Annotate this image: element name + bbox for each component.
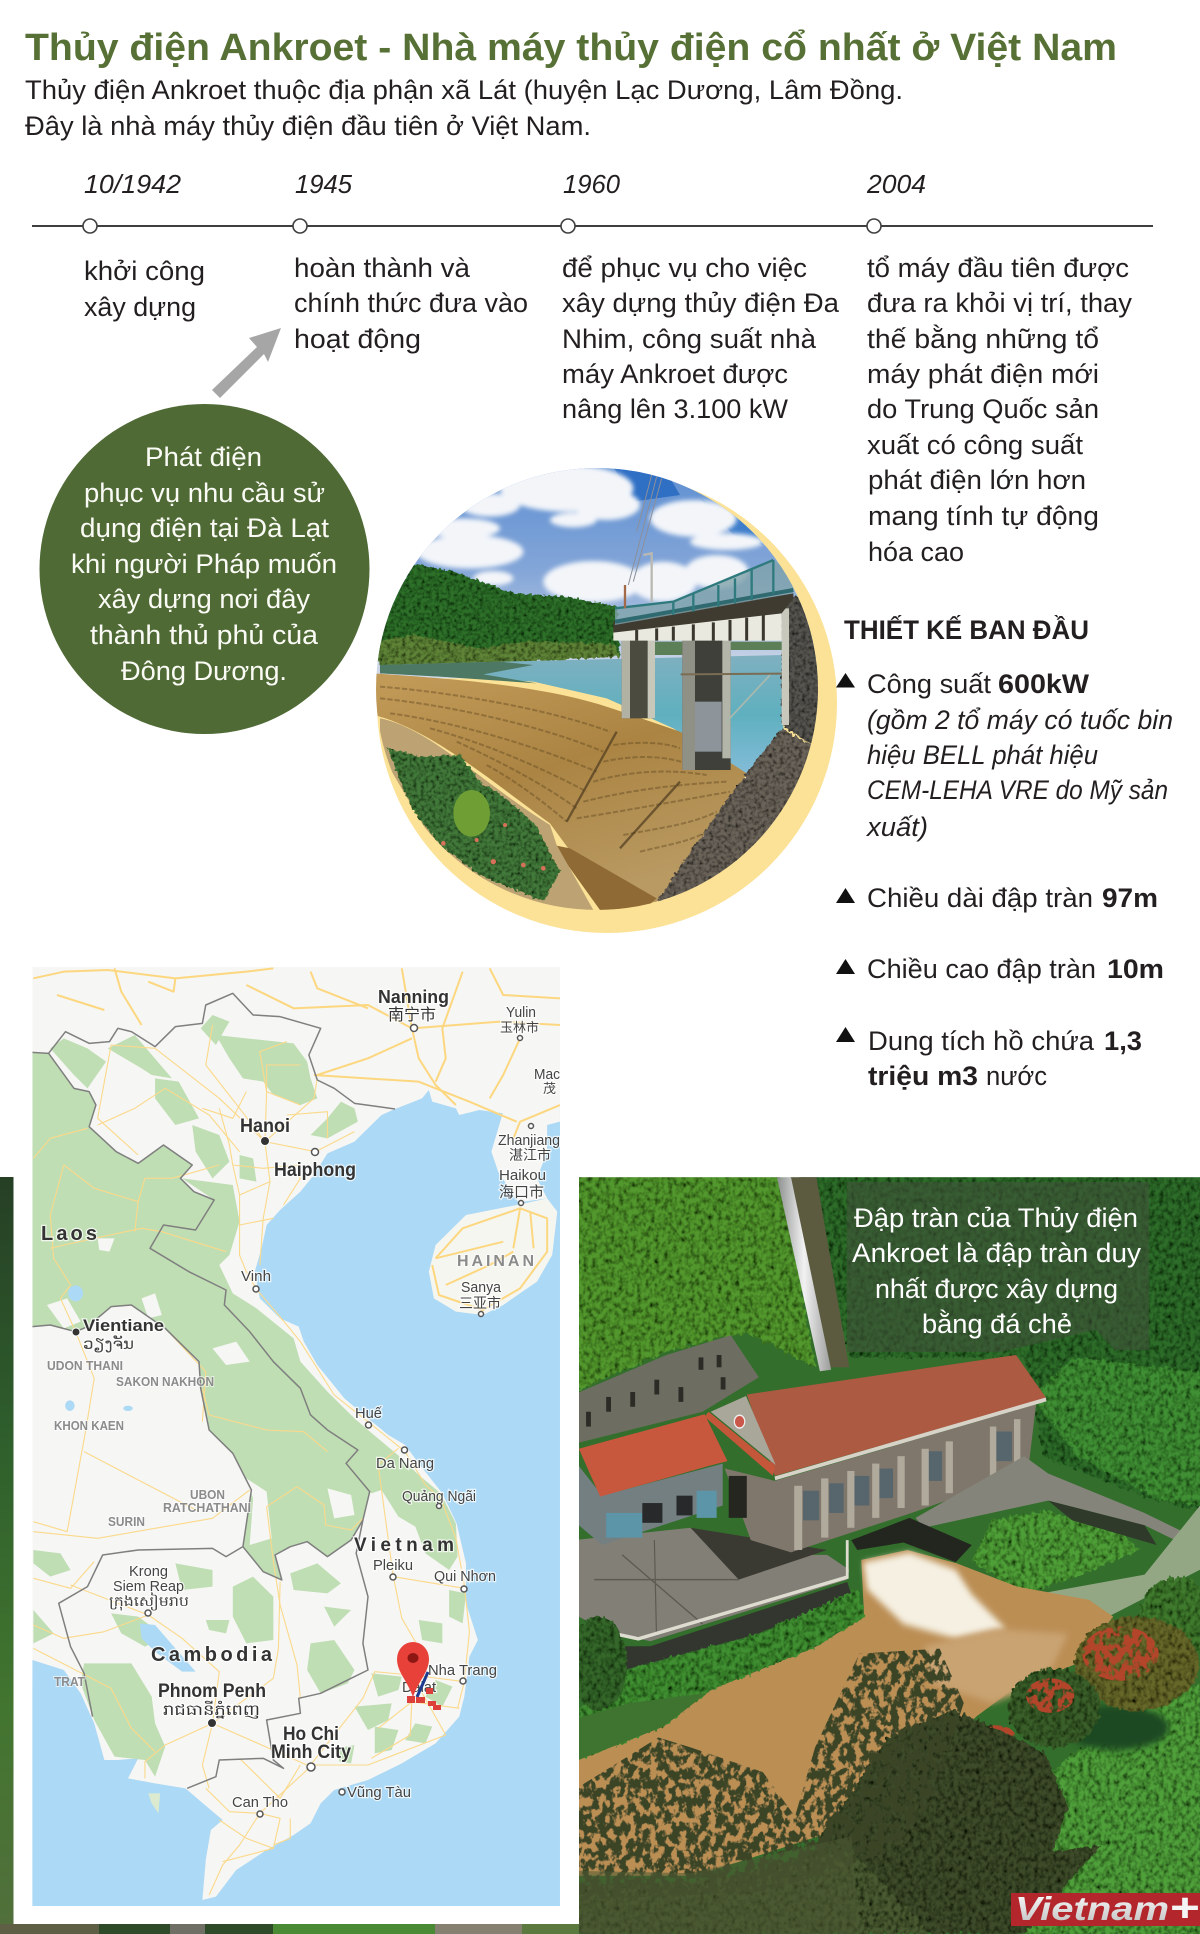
main roads [33,968,560,1310]
wing roof [579,1414,728,1497]
lakes [65,1285,196,1672]
item: capacity: (gồm 2 tổ máy có tuốc bin [867,705,1173,735]
map pin: Ankroet [397,1642,441,1710]
item: spillway length: Chiều dài đập tràn [867,883,1093,913]
map labels: China: 茂 [543,1081,556,1096]
forest base [579,1177,1200,1934]
flowering trees [1008,1577,1200,1747]
milestone 2004: xuất có công suất [867,430,1084,460]
milestone 1945: hoạt động [294,324,421,354]
wing wall [579,1464,723,1545]
map labels: Laos and Thailand: ວຽງຈັນ [83,1334,134,1353]
milestone 10/1942: 10/1942 [84,169,182,199]
callout circle: purpose: thành thủ phủ của [90,620,319,650]
map labels: Vietnam: Quảng Ngãi [402,1488,476,1505]
foam [863,1552,1006,1639]
timeline [32,169,1153,567]
milestone 10/1942 [83,169,205,322]
milestone 1945: 1945 [295,169,353,199]
green side stream [1036,1506,1200,1617]
callout circle: purpose: khi người Pháp muốn [71,549,337,579]
forest: Laos [32,1052,370,1580]
forest: northern Vietnam [50,1015,358,1182]
map labels: Vietnam: Pleiku [373,1557,413,1574]
Phu Quoc [148,1793,160,1813]
milestone 1960: 1960 [563,169,621,199]
milestone 1960: máy Ankroet được [562,359,788,389]
map shapes [30,965,562,1910]
map labels: Cambodia: ក្រុងសៀមរាប [109,1592,189,1611]
map labels: Vietnam: Dalat [402,1679,437,1696]
spillway [373,673,747,910]
logo: Vietnam+ [1011,1886,1200,1930]
retaining wall [574,1335,759,1444]
item: reservoir volume: triệu m3 [868,1061,978,1091]
map labels: Cambodia: Krong [129,1563,168,1580]
map labels: Laos and Thailand: Laos [41,1223,97,1245]
right meadow [992,1683,1200,1934]
map of Vietnam [30,965,562,1910]
pipe channel [789,1170,849,1367]
grass bank [579,1589,865,1760]
muddy river [579,1550,1113,1876]
milestone 2004 [866,169,1132,567]
design heading: THIẾT KẾ BAN ĐẦU [844,614,1089,645]
forest: central Vietnam [150,1178,458,1570]
forest: Cambodia and eastern Thailand [33,1550,354,1777]
intro text: Thủy điện Ankroet thuộc địa phận xã Lát (huyện Lạc Dương, Lâm Đồng. [25,75,903,105]
item: spillway length: 97m [1102,883,1158,913]
sea [30,1090,562,1910]
map labels: Laos and Thailand [41,1223,251,1689]
milestone 2004: phát điện lớn hơn [868,465,1086,495]
secondary roads [33,1025,469,1895]
map labels: Laos and Thailand: TRAT [54,1674,85,1689]
bank wall right [657,728,823,902]
map labels: China: Sanya [461,1279,502,1296]
map labels: China: HAINAN [457,1253,534,1270]
map labels: Vietnam: Huế [355,1405,383,1422]
caption overlay: bằng đá chẻ [922,1308,1072,1339]
milestone 1960: để phục vụ cho việc [562,253,807,283]
map labels: Cambodia: រាជធានីភ្នំពេញ [163,1700,260,1719]
main roof [747,1355,1046,1476]
map labels: Vietnam: Ho Chi [283,1724,339,1745]
milestone 2004: 2004 [866,169,926,199]
map labels: Vietnam: Minh City [271,1742,351,1763]
left shrub [569,1617,627,1710]
caption overlay: Đập tràn của Thủy điện [854,1203,1138,1233]
item: capacity: 600kW [998,669,1090,699]
pier right [682,640,731,770]
red blossoms [976,1626,1159,1750]
lake [380,655,783,775]
arrow: from circle to 1945 [212,328,281,398]
map labels: Laos and Thailand: SURIN [108,1514,145,1529]
milestone 2004: máy phát điện mới [867,359,1099,389]
item: capacity: Công suất [867,669,991,699]
map labels: Vietnam: Da Nang [376,1455,434,1472]
upper walkway edge [380,718,593,910]
milestone 1960: xây dựng thủy điện Đa [562,288,840,318]
country borders [32,993,395,1788]
bridge railing [615,560,793,625]
caption overlay: Ankroet là đập tràn duy [852,1238,1142,1268]
caption overlay: nhất được xây dựng [875,1274,1118,1304]
front gable [711,1396,776,1465]
map labels: Vietnam: Haiphong [274,1160,356,1181]
item: capacity: xuất) [865,812,928,842]
item: reservoir volume: 1,3 [1104,1026,1142,1056]
milestone 2004: tổ máy đầu tiên được [867,253,1129,283]
white patches in Laos [47,1238,354,1545]
map labels: Vietnam [232,1116,497,1817]
item: spillway height: 10m [1107,954,1164,984]
logo: Vietnam+: + [1169,1886,1199,1930]
dam photo circle [373,465,827,910]
photo: Ankroet power house [569,1170,1200,1934]
callout circle: purpose: dụng điện tại Đà Lạt [80,513,330,543]
map labels: Cambodia [109,1563,273,1728]
intro text: Đây là nhà máy thủy điện đầu tiên ở Việt Nam. [25,111,591,141]
bridge deck [613,613,782,641]
outlet wall [851,1518,972,1562]
map labels: Cambodia: Siem Reap [113,1578,184,1595]
callout circle: purpose: Phát điện [145,442,262,472]
intro text [25,75,903,141]
logo: Vietnam+: Vietnam [1015,1890,1169,1927]
item: spillway height: Chiều cao đập tràn [867,954,1096,984]
stone abutment [780,596,818,744]
title: Thủy điện Ankroet - Nhà máy thủy điện cổ nhất ở Việt Nam [25,27,1117,69]
lower rib band [553,845,657,910]
milestone 2004: đưa ra khỏi vị trí, thay [867,288,1132,318]
yard railing [604,1540,847,1639]
map labels: China: 海口市 [499,1184,544,1201]
upper right forest [795,1170,1200,1515]
map labels: Vietnam: Nha Trang [428,1662,497,1679]
dark wall below railing [624,1582,852,1669]
item: reservoir volume [836,1026,1142,1091]
item: capacity [836,669,1173,842]
map labels: Laos and Thailand: Vientiane [83,1316,164,1335]
milestone 1960 [561,169,840,424]
entrance [729,1476,747,1518]
milestone 2004: thế bằng những tổ [867,323,1099,354]
sky [373,465,827,678]
shoreline scrub [373,635,620,667]
item: spillway length [836,883,1158,913]
caption overlay [847,1182,1149,1352]
windows [803,1431,1012,1520]
map labels: China: 三亚市 [459,1295,501,1311]
callout circle: purpose: Đông Dương. [121,656,287,686]
item: reservoir volume: Dung tích hồ chứa [868,1026,1095,1056]
clouds [417,465,763,602]
Leizhou peninsula [491,1108,560,1202]
map labels: Cambodia: Phnom Penh [158,1681,266,1702]
map labels: Vietnam: Hanoi [240,1116,290,1137]
pier left [622,640,655,718]
sparse foreground foliage over the river [579,1649,964,1900]
map labels: Vietnam: Vinh [241,1268,271,1285]
map labels: Cambodia: Cambodia [151,1644,273,1666]
white map frame [14,950,579,1924]
map labels: Vietnam: Vietnam [354,1535,454,1556]
milestone 1960: Nhim, công suất nhà [562,324,817,354]
milestone 2004: hóa cao [868,537,964,567]
yellow backing circle [377,473,837,933]
callout circle: purpose: phục vụ nhu cầu sử [84,478,325,508]
item: spillway height [836,954,1164,984]
callout circle: purpose [40,404,370,734]
map labels: Vietnam: Qui Nhơn [434,1568,496,1585]
map labels: China: Zhanjiang [498,1132,560,1149]
item: capacity: hiệu BELL phát hiệu [867,740,1098,770]
tree shadow [1064,1705,1169,1750]
milestone 10/1942: khởi công [84,256,205,286]
hillside plantation [574,1170,815,1392]
milestone 1945: chính thức đưa vào [294,288,528,318]
milestone 2004: mang tính tự động [868,501,1099,531]
map labels: Laos and Thailand: SAKON NAKHON [116,1374,214,1389]
milestone 1945: hoàn thành và [294,253,471,283]
map labels: China: Mac [534,1066,560,1083]
penstock pipe [777,1177,831,1371]
map labels: China: Haikou [499,1167,546,1184]
map labels: China: 南宁市 [388,1006,436,1024]
meadow by the stream [972,1510,1141,1594]
dense foreground tree [579,1710,1100,1934]
callout circle: purpose: xây dựng nơi đây [98,584,310,614]
design list [836,669,1173,1091]
milestone 1960: nâng lên 3.100 kW [562,394,789,424]
map labels: Laos and Thailand: UBON [190,1487,225,1502]
item: reservoir volume: nước [986,1061,1047,1091]
map labels: Laos and Thailand: UDON THANI [47,1358,123,1373]
map labels: China: 湛江市 [509,1147,551,1163]
milestone 2004: do Trung Quốc sản [867,394,1099,424]
milestone 1945 [293,169,528,354]
map labels: China: Yulin [506,1004,536,1021]
map labels: Vietnam: Can Tho [232,1794,288,1811]
spillway ribs [380,687,730,852]
far shore behind bridge [655,642,782,655]
item: capacity: CEM-LEHA VRE do Mỹ sản [867,775,1168,805]
map labels: China: Nanning [378,987,449,1007]
map labels: China: 玉林市 [500,1020,539,1035]
plants [387,748,560,902]
wires and pole [625,475,662,608]
paved yard [574,1528,849,1641]
map labels: China [378,987,560,1316]
map labels: Laos and Thailand: RATCHATHANI [163,1500,251,1515]
forest: southern Vietnam [338,1590,466,1763]
Hainan [429,1198,557,1315]
map labels: Laos and Thailand: KHON KAEN [54,1418,124,1433]
main wall [725,1404,1036,1552]
milestone 10/1942: xây dựng [84,292,196,322]
side platform and footbridge [916,1456,1180,1539]
map labels: Vietnam: Vũng Tàu [347,1784,411,1801]
background strip: forest photo behind the map [0,1177,582,1934]
hill forest [373,563,620,665]
